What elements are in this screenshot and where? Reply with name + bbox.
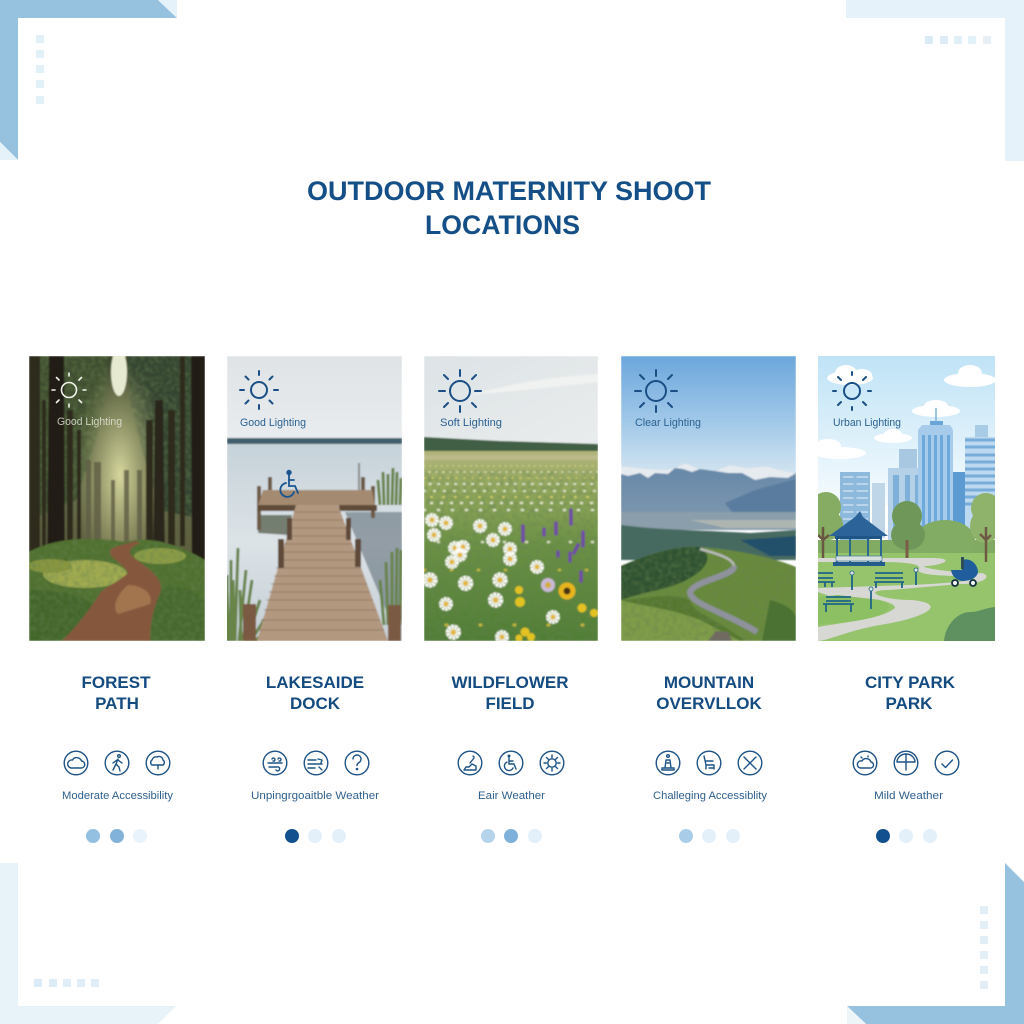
heading: DOCK: [290, 694, 341, 713]
column: lakeside dock details: [251, 673, 379, 843]
panel: forest path: [28, 348, 205, 641]
icon: stairlift chair: [697, 751, 721, 775]
panel: mountain overlook: [621, 356, 796, 641]
panel: city park: [811, 356, 1001, 641]
caption: Unpingrgoaitble Weather: [251, 790, 379, 802]
corner frame: bottom right: [847, 863, 1024, 1024]
title: LOCATIONS: [425, 210, 580, 240]
icon: umbrella: [894, 751, 918, 775]
icon: sun: [635, 370, 677, 412]
icon: wheelchair: [280, 471, 298, 497]
icon: question: [345, 751, 369, 775]
heading: OVERVLLOK: [656, 694, 762, 713]
heading: PARK: [886, 694, 933, 713]
icon: tree cloud: [146, 751, 170, 775]
label: lighting: Good Lighting: [57, 416, 122, 428]
heading: WILDFLOWER: [451, 673, 569, 692]
heading: FIELD: [485, 694, 535, 713]
label: lighting: Clear Lighting: [635, 417, 701, 429]
label: lighting: Soft Lighting: [440, 417, 502, 429]
icon: sun: [540, 751, 564, 775]
column: city park details: [853, 673, 959, 843]
title: [307, 176, 712, 240]
rating dots: [876, 829, 937, 843]
heading: MOUNTAIN: [664, 673, 754, 692]
photo: wildflower meadow: [424, 356, 598, 642]
icon: wheelchair: [499, 751, 523, 775]
column: wildflower field details: [451, 673, 569, 843]
icon: accessible seat: [458, 751, 482, 775]
icon: sun: [240, 371, 278, 409]
panel: lakeside dock: [227, 356, 402, 641]
caption: Moderate Accessibility: [62, 790, 174, 802]
heading: LAKESAIDE: [266, 673, 364, 692]
heading: CITY PARK: [865, 673, 956, 692]
column: forest path details: [62, 673, 174, 843]
icon: cloud sun: [853, 751, 877, 775]
corner frame: top right: [846, 0, 1024, 161]
icon: check: [935, 751, 959, 775]
caption: Eair Weather: [478, 790, 545, 802]
panel: wildflower field: [424, 356, 598, 642]
column: mountain overlook details: [653, 673, 768, 843]
rating dots: [679, 829, 740, 843]
rating dots: [285, 829, 346, 843]
title: OUTDOOR MATERNITY SHOOT: [307, 176, 712, 206]
icon: cloud: [64, 751, 88, 775]
corner frame: top left: [0, 0, 177, 160]
illustration: park and skyline: [811, 356, 1001, 641]
icon: wind: [263, 751, 287, 775]
photo: lake and dock: [227, 356, 402, 641]
rating dots: [86, 829, 147, 843]
photo: mountain road: [621, 356, 796, 641]
corner frame: bottom left: [0, 863, 176, 1024]
icon: sun: [52, 373, 86, 407]
heading: FOREST: [82, 673, 151, 692]
icon: monument: [656, 751, 680, 775]
icon: cross: [738, 751, 762, 775]
photo: forest: [28, 348, 205, 641]
label: lighting: Urban Lighting: [833, 417, 901, 429]
caption: Challeging Accessiblity: [653, 790, 768, 802]
caption: Mild Weather: [874, 790, 943, 802]
heading: PATH: [95, 694, 139, 713]
icon: sun: [833, 372, 871, 410]
icon: sun: [439, 370, 481, 412]
rating dots: [481, 829, 542, 843]
icon: rain wind: [304, 751, 328, 775]
label: lighting: Good Lighting: [240, 417, 306, 429]
icon: walker: [105, 751, 129, 775]
